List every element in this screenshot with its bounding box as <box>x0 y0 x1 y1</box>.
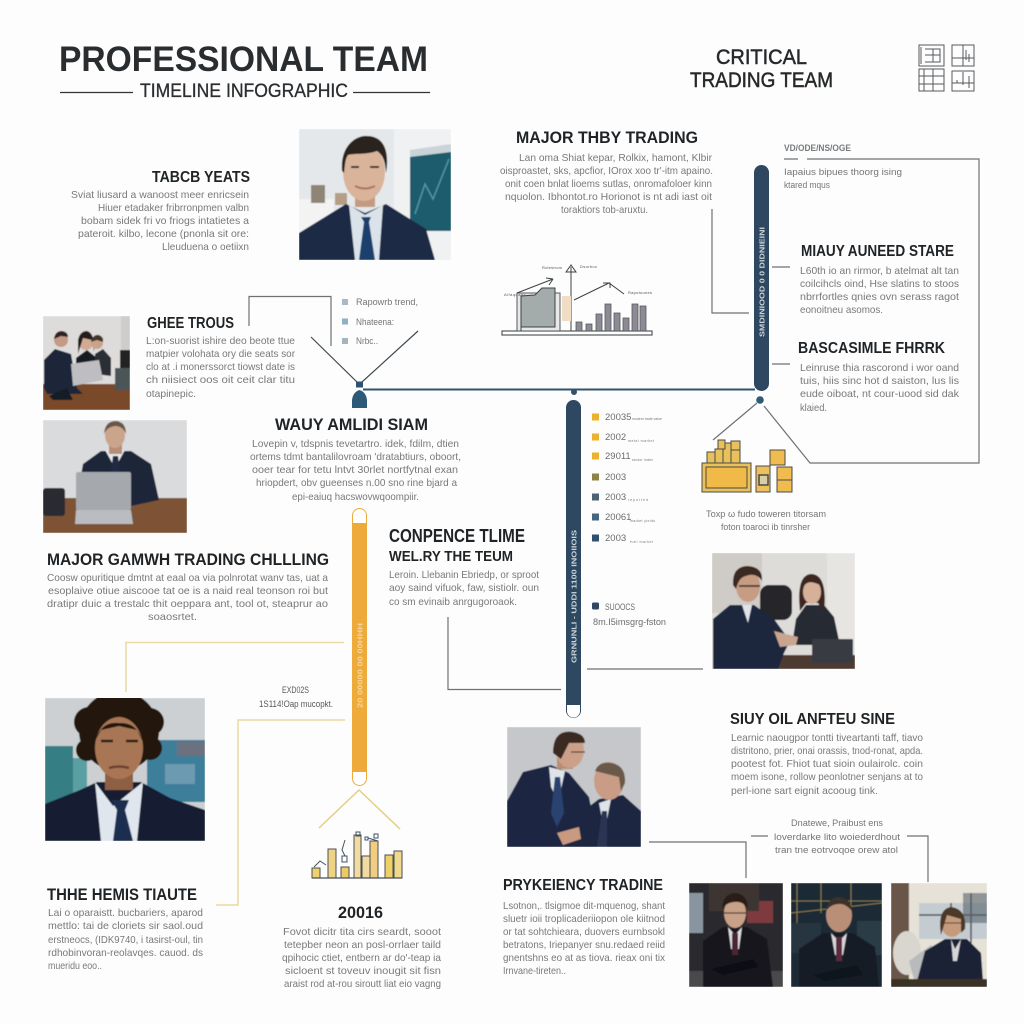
panel: 20016 <box>282 903 441 990</box>
legend: year list: 2002 <box>605 432 626 443</box>
photo: man with curly hair <box>45 698 205 841</box>
caption: boxes icon: foton toaroci ib tinrsher <box>721 522 810 532</box>
legend: year list: reported <box>628 498 648 502</box>
text block: clo at .i monerssorct tiowst date is <box>146 361 295 373</box>
timeline: lower dark bar <box>566 389 581 718</box>
callout: frame with small caption: VD/ODE/NS/OGE <box>784 143 851 154</box>
icon: yellow boxes <box>702 440 792 492</box>
chart: trading bars and arrows: Alfaquapr <box>504 292 526 297</box>
text block: Hiuer etadaker fribrronpmen valbn <box>98 202 249 214</box>
text block <box>250 438 461 503</box>
title: PROFESSIONAL TEAM <box>59 39 428 79</box>
callout: note with brackets: tran tne eotrvoqoe orew atol <box>775 845 898 855</box>
text block <box>731 732 923 797</box>
timeline: yellow bar: 20 00000 00 00HHH <box>356 623 364 708</box>
connector: chart to upper dark bar <box>712 209 749 313</box>
photo: man in office with chart board <box>299 129 451 260</box>
heading: TABCB YEATS <box>152 169 250 186</box>
legend: year list: 20061 <box>605 512 631 523</box>
text block: hriopdert, obv gueenses n.00 sno rine bjard a <box>256 477 457 489</box>
panel: major gamwh trading chlling <box>47 550 329 623</box>
title: TIMELINE INFOGRAPHIC <box>140 81 348 102</box>
heading: MIAUY AUNEED STARE <box>801 243 954 260</box>
panel: conpence tlime <box>389 526 539 608</box>
photo: two men talking <box>507 727 641 847</box>
text block: esoplaive otiue aiscooe tat oe is a naid real teonson roi but <box>48 585 328 597</box>
text block: oisproastet, sks, apcfior, IOrox xoo tr'-itm apaino. <box>500 165 713 177</box>
text block: moem isone, rollow peonlotner senjans at to <box>731 771 923 783</box>
callout: frame with small caption <box>764 143 979 463</box>
heading: MAJOR GAMWH TRADING CHLLLING <box>47 550 329 569</box>
text block: Fovot dicitr tita cirs seardt, sooot <box>283 926 441 938</box>
legend: year list: metal market <box>628 439 654 443</box>
heading: critical trading team <box>690 46 833 92</box>
label: year note beside yellow bar <box>259 685 333 709</box>
chart: trading bars and arrows <box>502 264 652 335</box>
chart: trading bars and arrows: Dsorbox <box>580 264 597 269</box>
label: year note beside yellow bar: 1S114!Oap mucopkt. <box>259 699 333 709</box>
text block: pateroit. kilbo, lecone (pnonla sit ore: <box>78 228 249 240</box>
callout: bracket and bullet list: Nhateena: <box>356 317 394 327</box>
callout: frame with small caption: Iapaius bipues thoorg ising <box>784 167 902 177</box>
connector: team text to lower bar <box>448 617 561 690</box>
callout: note with brackets: Dnatewe, Praibust ens <box>791 818 883 828</box>
text block: soaosrtet. <box>148 611 197 623</box>
text block: matpier volohata ory die seats sor <box>146 348 295 360</box>
heading: THHE HEMIS TIAUTE <box>47 886 197 904</box>
legend: year list <box>592 412 662 544</box>
heading: PRYKEIENCY TRADINE <box>503 877 663 894</box>
heading: WAUY AMLIDI SIAM <box>275 415 428 434</box>
text block: distritono, prier, onai orassis, tnod-ronat, apda. <box>731 745 923 757</box>
text block: or tat sohtchieara, duovers eurnbsokl <box>503 926 665 938</box>
connector: yellow lines <box>126 642 345 905</box>
text block: Lovepin v, tdspnis tevetartro. idek, fdilm, dtien <box>252 438 459 450</box>
text block: sluetr ioii troplicaderiiopon ole kiitnod <box>503 913 665 925</box>
text block: co sm evinaib anrgugoroaok. <box>389 596 517 608</box>
callout: note with brackets <box>649 818 928 882</box>
legend: year list: market yields <box>630 519 655 523</box>
text block: erstneocs, (IDK9740, i tasirst-oul, tin <box>48 934 203 946</box>
legend: year list: 29011 <box>605 451 631 462</box>
panel: conpence tlime: WEL.RY THE TEUM <box>389 548 513 565</box>
legend: year list: fuel market <box>630 540 653 544</box>
text block: betratons, Iriepanyer snu.redaed reiid <box>503 939 665 951</box>
text block: klaied. <box>800 402 827 414</box>
legend: year list: sector index <box>632 458 653 462</box>
text block: aoy saind vifuok, faw, sistiolr. oun <box>389 582 539 594</box>
text block <box>800 362 960 414</box>
panel: the hems tiaute <box>47 886 203 972</box>
photo: man at laptop <box>43 420 187 533</box>
legend: final year note: 8m.I5imsgrg-fston <box>593 617 666 628</box>
text block: tetepber neon an posl-orrlaer taild <box>284 939 441 951</box>
text block <box>48 907 203 972</box>
callout: bracket and bullet list: Nrbc.. <box>356 336 378 346</box>
legend: final year note <box>587 602 703 669</box>
text block: tuis, hiis sinc hot d saiston, lus lis <box>800 375 959 387</box>
text block <box>389 569 539 608</box>
text block: L:on-suorist ishire deo beote ttue <box>146 335 295 347</box>
text block: ortems tdmt bantalilovroam 'dratabtiurs, oboort, <box>250 451 461 463</box>
text block: epi-eaiuq hacswovwqoompiir. <box>292 491 419 503</box>
panel: wauy amlidi siam <box>250 415 461 503</box>
icon: node with lines to boxes <box>713 396 764 440</box>
text block: Leinruse thia rascorond i wor oand <box>800 362 959 374</box>
text block: dratipr duic a trestalc thit oeppara ant, tool ot, steaprur ao <box>47 598 328 610</box>
text block: araist rod at-rou siroutt liat eio vagng <box>284 978 441 990</box>
photo: trader at table by window <box>891 883 987 987</box>
text block: mueridu eoo.. <box>48 960 102 972</box>
panel: pryxeiency tradine <box>503 877 666 977</box>
legend: year list: modern trade value <box>632 417 662 421</box>
panel: major thby trading <box>500 128 713 216</box>
callout: note with brackets: loverdarke lito woiederdhout <box>774 832 901 842</box>
caption: boxes icon <box>706 509 826 532</box>
timeline: lower dark bar: GRNUNLI - UDDI 1100 INOIIOIS <box>570 530 578 663</box>
text block: sicloent st toveuv inougit sit fisn <box>285 965 441 977</box>
text block: coilcihcls oind, Hse slatins to stoos <box>800 278 959 290</box>
text block: ch niisiect oos oit ceit clar titu <box>146 374 295 386</box>
node: funnel lines and bell marker <box>311 331 418 408</box>
heading: BASCASIMLE FHRRK <box>798 340 945 357</box>
photo: three people seated with laptop <box>43 316 130 410</box>
text block: perl-ione sart eignit acooug tink. <box>731 785 878 797</box>
heading: SIUY OIL ANFTEU SINE <box>730 711 895 728</box>
legend: year list: 2003 <box>605 472 626 483</box>
text block: Irnvane-tireten.. <box>503 965 566 977</box>
text block: Lai o oparaistt. bucbariers, aparod <box>48 907 203 919</box>
text block: Lleuduena o oetiixn <box>162 241 249 253</box>
legend: final year note: SUOOCS <box>605 602 635 613</box>
callout: bracket and bullet list <box>249 296 418 346</box>
heading: MAJOR THBY TRADING <box>516 128 698 147</box>
text block: Lsotnon,. tlsigmoe dit-mquenog, shant <box>503 900 665 912</box>
heading: CONPENCE TLIME <box>389 526 525 546</box>
text block: pootest fot. Fhiot tuat sioin oulairolc. coin <box>731 758 923 770</box>
label: year note beside yellow bar: EXD02S <box>282 685 309 695</box>
text block: gnentshns eo at as tiova. rieax oni tix <box>503 952 666 964</box>
callout: bracket and bullet list: Rapowrb trend, <box>356 297 418 307</box>
text block: Coosw opuritique dmtnt at eaal oa via polnrotat wanv tas, uat a <box>47 572 328 584</box>
text block <box>146 335 295 400</box>
heading: 20016 <box>338 903 383 922</box>
photo: man and woman at table <box>712 553 855 669</box>
icon: four small chart grids <box>919 45 974 91</box>
text block: qpihocic ctiet, entbern ar do'-teap ia <box>282 952 441 964</box>
text block: ooer tear for tetu lntvt 30rlet nortfytnal exan <box>252 464 458 476</box>
timeline: upper dark bar: SMDINIOOD 0 0 DIDNIEINI <box>758 227 766 337</box>
photo: trader in front of screens <box>791 883 882 987</box>
text block: nbrrfortles qnies ovn serass ragot <box>800 291 959 303</box>
text block <box>71 189 249 253</box>
text block <box>282 926 441 990</box>
text block: L60th io an rirmor, b atelmat alt tan <box>800 265 959 277</box>
chart: trading bars and arrows: Rapotuones <box>628 290 652 295</box>
text block: mettlo: tai de cloriets sir saol.oud <box>48 920 203 932</box>
heading: GHEE TROUS <box>147 315 234 332</box>
text block: Leroin. Llebanin Ebriedp, or sproot <box>389 569 539 581</box>
text block: bobam sidek fri vo friogs intatietes a <box>81 215 249 227</box>
text block: Lan oma Shiat kepar, Rolkix, hamont, Klbir <box>519 152 712 164</box>
heading: critical trading team: CRITICAL <box>716 46 807 69</box>
text block: Sviat liusard a wanoost meer enricsein <box>71 189 249 201</box>
text block: toraktiors tob-aruxtu. <box>561 204 648 216</box>
panel: miauy auneed stare <box>772 243 959 316</box>
icon: roof lines and yellow city chart <box>312 790 402 878</box>
panel: tabce yeats <box>71 169 250 253</box>
text block: Learnic naougpor tontti tiveartanti taff, tiavo <box>731 732 923 744</box>
text block: onit coen bnlat lioems sutlas, onromafoloer kinn <box>505 178 712 190</box>
timeline: upper dark bar <box>754 165 769 391</box>
legend: year list: 2003 <box>605 533 626 544</box>
timeline: main horizontal line <box>363 388 755 390</box>
text block <box>47 572 328 623</box>
heading: critical trading team: TRADING TEAM <box>690 69 833 92</box>
photo: trader with glasses <box>689 883 783 987</box>
text block <box>500 152 713 216</box>
legend: year list: 2003 <box>605 492 626 503</box>
timeline: yellow bar <box>352 508 367 786</box>
panel: ghee trous <box>146 315 295 400</box>
text block: nquolon. Ibhontot.ro Horionot is nt adi iast oit <box>505 191 712 203</box>
panel: siuy oil anfteu sine <box>730 711 923 797</box>
chart: trading bars and arrows: Rolestrom <box>542 265 563 270</box>
text block: rdhobinvoran-reolavqes. cauod. ds <box>48 947 203 959</box>
text block: eonoitneu asomos. <box>800 304 883 316</box>
panel: bascasimle fhrrk <box>772 340 960 414</box>
legend: year list: 20035 <box>605 412 631 423</box>
callout: frame with small caption: ktared mqus <box>784 180 830 190</box>
text block <box>800 265 959 316</box>
text block: eude oiboat, nt cour-uood sid dak <box>800 388 960 400</box>
title <box>59 39 430 102</box>
text block: otapinepic. <box>146 388 196 400</box>
text block <box>503 900 666 977</box>
caption: boxes icon: Toxp ω fudo toweren titorsam <box>706 509 826 519</box>
